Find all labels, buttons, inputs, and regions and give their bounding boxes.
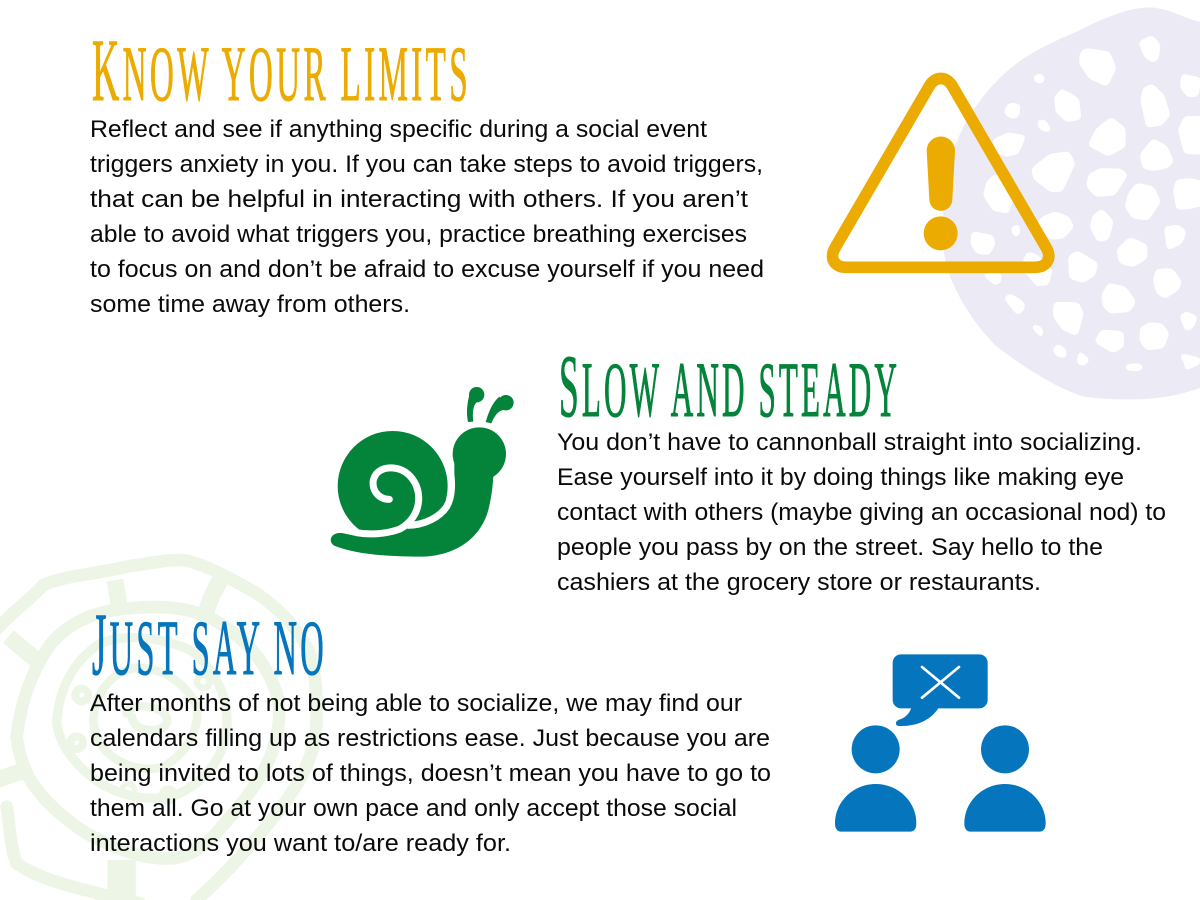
text block: know your limits: that can be helpful in interacting with others. If you aren’t <box>90 186 748 213</box>
icon: two people with crossed-out speech bubble <box>835 654 1046 832</box>
text block: know your limits <box>90 116 764 318</box>
background: lavender spotted blob <box>943 7 1200 399</box>
panel: know your limits: KNOW YOUR LIMITS <box>92 22 471 120</box>
panel: slow and steady <box>330 338 1166 596</box>
text block: slow and steady: cashiers at the grocery store or restaurants. <box>557 569 1041 596</box>
panel: just say no: JUST SAY NO <box>92 596 327 694</box>
panel: know your limits <box>90 22 1049 318</box>
text block: slow and steady <box>557 429 1166 596</box>
text block: slow and steady: Ease yourself into it by doing things like making eye <box>557 464 1124 491</box>
background: pale green spiral shell <box>0 560 317 900</box>
text block: know your limits: Reflect and see if anything specific during a social event <box>90 116 707 143</box>
text block: know your limits: some time away from others. <box>90 291 410 318</box>
panel: just say no <box>90 596 1046 857</box>
text block: know your limits: to focus on and don’t be afraid to excuse yourself if you need <box>90 256 764 283</box>
text block: slow and steady: contact with others (maybe giving an occasional nod) to <box>557 499 1166 526</box>
text block: just say no: them all. Go at your own pace and only accept those social <box>90 795 737 822</box>
text block: just say no: being invited to lots of things, doesn’t mean you have to go to <box>90 760 771 787</box>
text block: just say no: After months of not being able to socialize, we may find our <box>90 690 742 717</box>
icon: snail <box>330 387 514 557</box>
text block: just say no: calendars filling up as restrictions ease. Just because you are <box>90 725 770 752</box>
text block: slow and steady: You don’t have to cannonball straight into socializing. <box>557 429 1142 456</box>
text block: know your limits: triggers anxiety in you. If you can take steps to avoid triggers, <box>90 151 763 178</box>
text block: know your limits: able to avoid what triggers you, practice breathing exercises <box>90 221 747 248</box>
text block: just say no <box>90 690 771 857</box>
text block: just say no: interactions you want to/are ready for. <box>90 830 511 857</box>
text block: slow and steady: people you pass by on the street. Say hello to the <box>557 534 1103 561</box>
icon: warning triangle <box>833 78 1049 267</box>
